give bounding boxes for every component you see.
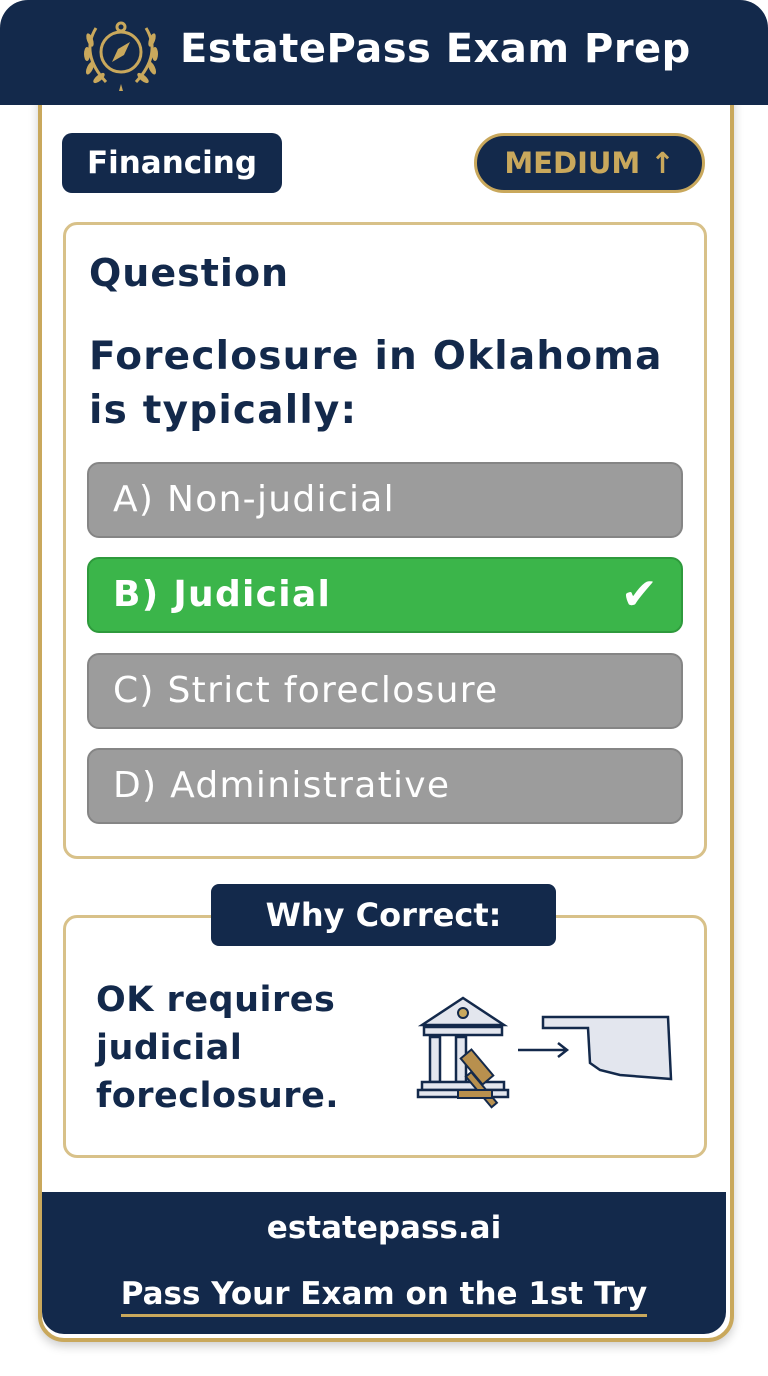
- option B correct: B) Judicial: [113, 574, 331, 615]
- explanation text: [94, 980, 339, 1116]
- header: [0, 0, 768, 105]
- option B correct: ✔: [621, 569, 659, 620]
- explanation text: judicial: [96, 1028, 242, 1068]
- icon: courthouse gavel arrow oklahoma: [416, 996, 672, 1109]
- difficulty pill: MEDIUM ↑: [504, 146, 675, 180]
- option A: [87, 462, 683, 538]
- explanation text: foreclosure.: [96, 1076, 339, 1116]
- panel: question: [63, 222, 707, 859]
- question text: [89, 334, 663, 433]
- label: Why Correct: Why Correct:: [266, 896, 501, 934]
- option D: D) Administrative: [113, 765, 450, 806]
- option B correct: [87, 557, 683, 633]
- footer: [42, 1192, 726, 1334]
- icon: compass laurel logo: [84, 22, 158, 91]
- option C: C) Strict foreclosure: [113, 670, 498, 711]
- question text: is typically:: [89, 388, 357, 433]
- label: Why Correct: [211, 884, 556, 946]
- category pill: Financing: [87, 145, 257, 181]
- option C: [87, 653, 683, 729]
- explanation text: OK requires: [96, 980, 335, 1020]
- panel: why correct: [63, 915, 707, 1158]
- question text: Foreclosure in Oklahoma: [89, 334, 663, 379]
- title: EstatePass Exam Prep: [180, 26, 691, 72]
- category pill: [62, 133, 282, 193]
- difficulty pill: [474, 133, 705, 193]
- footer url: estatepass.ai: [267, 1210, 501, 1246]
- heading: Question: Question: [89, 251, 289, 295]
- option A: A) Non-judicial: [113, 479, 395, 520]
- tagline: Pass Your Exam on the 1st Try: [121, 1276, 647, 1312]
- option D: [87, 748, 683, 824]
